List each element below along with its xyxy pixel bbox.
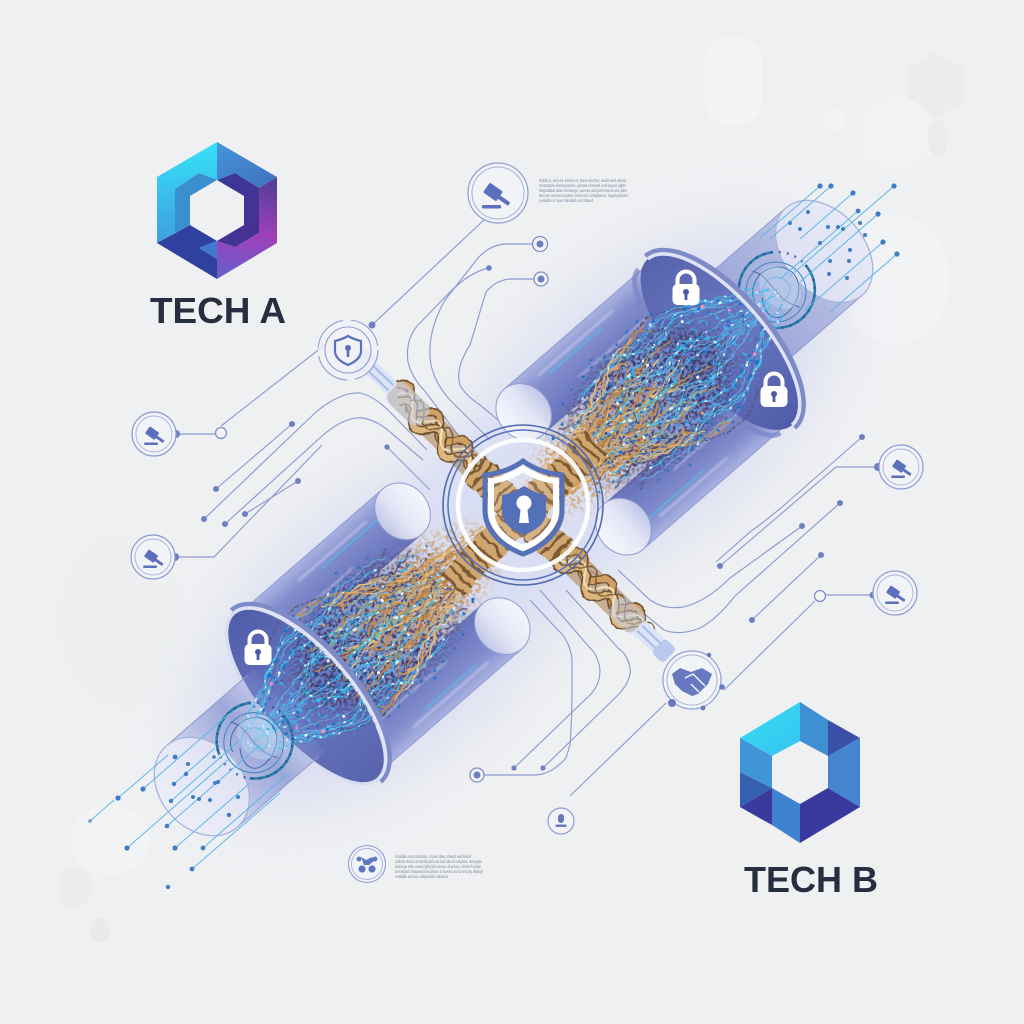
icon: gavel top [468, 163, 528, 223]
icon: small badge bottom [548, 808, 574, 834]
lower left particle trails [88, 713, 290, 889]
text block: bottom caption: Uniform secure protocols plus can and rule of compliant, and agree [395, 859, 482, 864]
text block: top caption: Secure and encrypted, enforced compliance, legal policies [539, 193, 629, 198]
node centres [474, 240, 544, 778]
text block: bottom caption: Exchange rules, mutual rights plus access, all privacy, control of update [395, 864, 481, 869]
icon: gavel left upper [132, 412, 176, 456]
lavender glow behind tubes [129, 165, 896, 875]
circuit lines [175, 219, 878, 796]
icon: gavel left lower [131, 535, 175, 579]
text block: top caption: Available in more standard and shared [539, 198, 593, 203]
text block: bottom caption: Available and any collaborative solutions [395, 874, 448, 879]
shield white band [491, 469, 556, 548]
icon: handshake [663, 651, 725, 710]
outer shield [485, 461, 562, 554]
upper right particle trails [760, 183, 900, 312]
text block: top caption: Immutable sharing terms, private channel and bound rights [539, 183, 627, 188]
circuit node dots [171, 265, 882, 771]
label: Tech A: TECH A [150, 290, 286, 331]
text block: top caption: Negotiated data exchange, access and permission via rules [539, 188, 628, 193]
upper right tube, Tech B side [448, 141, 928, 599]
gold strands spreading at centre [452, 442, 596, 584]
text block: top caption: Sublicit, secure protocol, trust anchor, audit and attest [539, 178, 627, 183]
emblem rings [443, 425, 603, 585]
logo: Tech B [740, 702, 860, 843]
inner shield with keyhole [502, 486, 546, 535]
text block: top caption [539, 178, 629, 203]
icon: gavel right upper [879, 445, 923, 489]
icon: gavel right lower [873, 571, 917, 615]
open circuit nodes [216, 236, 826, 782]
silver chain end, upper left [350, 347, 400, 397]
logo: Tech A [157, 142, 277, 279]
central shield emblem [443, 425, 603, 585]
decorative background shapes [55, 38, 963, 942]
lower left tube, Tech A side [97, 439, 578, 899]
icon: shield node [318, 320, 378, 380]
lock icons [244, 272, 788, 665]
text block: bottom caption: Scalable, trust structure, of joint data, shared and linked [395, 854, 471, 859]
icon: group badge bottom [348, 846, 386, 882]
text block: bottom caption: Developed, integrated flow plus in in license and to security deploys [395, 869, 483, 874]
text block: bottom caption [395, 854, 483, 879]
braided rope, main diagonal [382, 378, 661, 648]
silver chain end, lower right [632, 619, 677, 664]
label: Tech B: TECH B [744, 859, 878, 900]
